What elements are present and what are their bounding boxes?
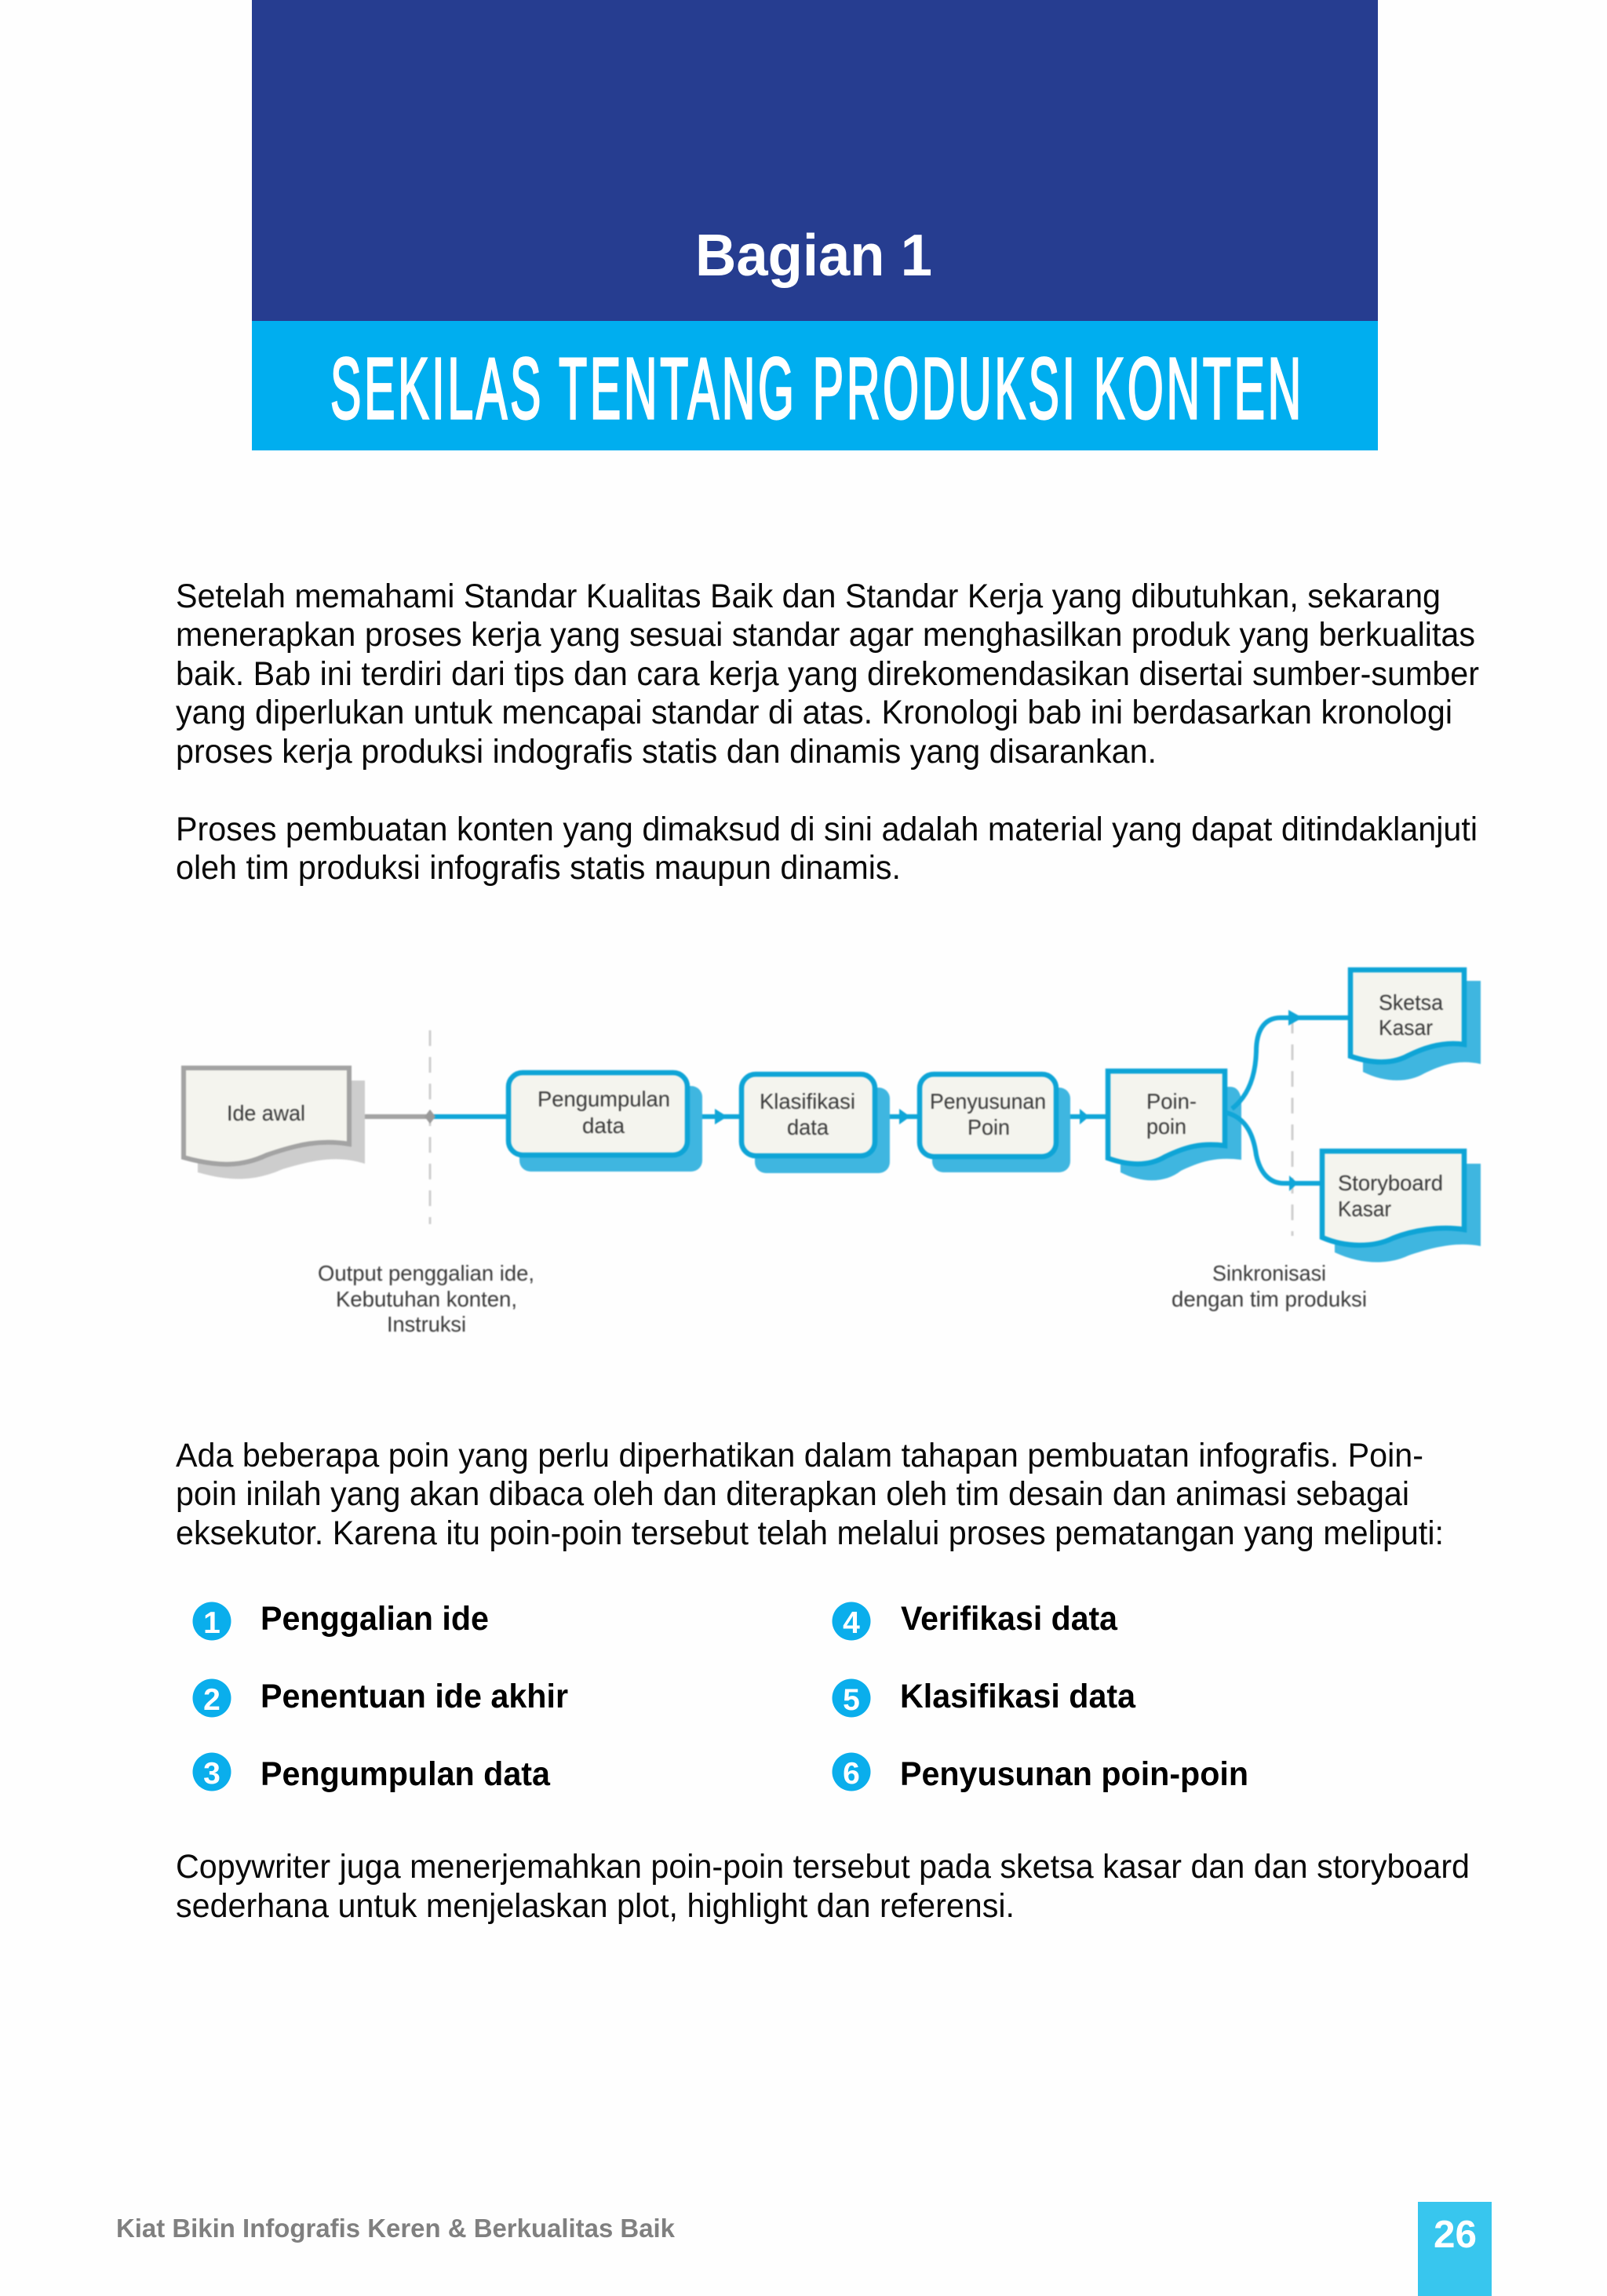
text block: closing paragraph: sederhana untuk menjelaskan plot, highlight dan referensi.	[176, 1887, 1015, 1925]
list item 2: Penentuan ide akhir	[261, 1678, 568, 1715]
document: Sketsa Kasar: Sketsa	[1379, 990, 1444, 1015]
text block: process definition paragraph	[176, 811, 1478, 887]
text block: closing paragraph: Copywriter juga menerjemahkan poin-poin tersebut pada sketsa kasar dan dan storyboard	[176, 1848, 1470, 1886]
list item 5: 5	[843, 1683, 860, 1717]
footer: page number: 26	[1434, 2214, 1477, 2256]
divider: left dashed line	[428, 1030, 432, 1224]
caption: sync with production team	[1172, 1261, 1367, 1311]
arrow: to Penyusunan	[890, 1109, 918, 1124]
document: Storyboard Kasar: Storyboard	[1338, 1171, 1443, 1195]
text block: points paragraph: Ada beberapa poin yang perlu diperhatikan dalam tahapan pembuatan infografis. Poin-	[176, 1437, 1423, 1474]
list item 4: 4	[843, 1606, 860, 1640]
divider: right dashed line	[1292, 1018, 1293, 1236]
process box: Klasifikasi data	[742, 1074, 890, 1173]
arrow: to Storyboard Kasar	[1226, 1113, 1321, 1191]
list item 6: Penyusunan poin-poin	[900, 1756, 1248, 1793]
arrow: to Poin-poin	[1070, 1109, 1106, 1124]
list item 3: 3	[203, 1757, 220, 1791]
text block: intro paragraph: baik. Bab ini terdiri dari tips dan cara kerja yang direkomendasikan disertai sumber-sumber	[176, 655, 1479, 693]
document: Ide awal: Ide awal	[227, 1101, 305, 1125]
list item 2: 2	[203, 1683, 220, 1717]
arrow: to Sketsa Kasar	[1232, 1010, 1349, 1109]
caption: output of idea exploration: Kebutuhan konten,	[336, 1287, 517, 1311]
text block: intro paragraph: Setelah memahami Standar Kualitas Baik dan Standar Kerja yang dibutuhkan, sekarang	[176, 578, 1441, 615]
document: Poin-poin	[1108, 1071, 1241, 1180]
caption: output of idea exploration: Output penggalian ide,	[318, 1261, 534, 1285]
list item 4: Verifikasi data	[901, 1601, 1117, 1638]
footer: page number	[1418, 2202, 1492, 2296]
text block: intro paragraph: yang diperlukan untuk mencapai standar di atas. Kronologi bab ini berdasarkan kronologi	[176, 694, 1452, 731]
document: Poin-poin: Poin-	[1146, 1089, 1197, 1113]
process box: Klasifikasi data: data	[787, 1115, 829, 1139]
process box: Klasifikasi data: Klasifikasi	[760, 1089, 855, 1113]
document: Sketsa Kasar	[1350, 970, 1481, 1081]
text block: intro paragraph: menerapkan proses kerja yang sesuai standar agar menghasilkan produk yang berkualitas	[176, 616, 1475, 654]
arrow: output of idea to data collection	[362, 1110, 507, 1124]
footer: book title: Kiat Bikin Infografis Keren & Berkualitas Baik	[116, 2214, 676, 2243]
list item 5: Klasifikasi data	[900, 1678, 1135, 1715]
list item 4	[832, 1601, 1117, 1640]
document: Storyboard Kasar	[1322, 1151, 1481, 1263]
header: section band	[252, 0, 1378, 450]
process box: Penyusunan Poin: Poin	[967, 1115, 1010, 1139]
document: Sketsa Kasar: Kasar	[1379, 1015, 1433, 1040]
document: Ide awal	[184, 1068, 365, 1179]
text block: process definition paragraph: oleh tim produksi infografis statis maupun dinamis.	[176, 849, 901, 887]
text block: points paragraph: eksekutor. Karena itu poin-poin tersebut telah melalui proses pematangan yang meliputi:	[176, 1514, 1444, 1552]
process box: Penyusunan Poin: Penyusunan	[930, 1089, 1046, 1113]
text block: intro paragraph: proses kerja produksi indografis statis dan dinamis yang disarankan.	[176, 733, 1157, 771]
text block: intro paragraph	[176, 578, 1479, 771]
text block: points paragraph	[176, 1437, 1444, 1552]
caption: sync with production team: dengan tim produksi	[1172, 1287, 1367, 1311]
caption: output of idea exploration: Instruksi	[387, 1312, 466, 1336]
document: Storyboard Kasar: Kasar	[1338, 1197, 1391, 1221]
list item 6: 6	[843, 1757, 860, 1791]
document: Poin-poin: poin	[1146, 1114, 1186, 1139]
process box: Penyusunan Poin	[920, 1074, 1070, 1172]
list item 1: 1	[203, 1606, 220, 1640]
arrow: to Klasifikasi	[702, 1109, 740, 1124]
numbered list: stages	[193, 1601, 1248, 1793]
process box: Pengumpulan data	[508, 1073, 702, 1172]
process box: Pengumpulan data: Pengumpulan	[537, 1087, 670, 1111]
process box: Pengumpulan data: data	[582, 1113, 625, 1138]
list item 1: Penggalian ide	[261, 1601, 489, 1638]
text block: points paragraph: poin inilah yang akan dibaca oleh dan diterapkan oleh tim desain dan animasi sebagai	[176, 1475, 1409, 1513]
flow diagram: content production process	[184, 970, 1481, 1336]
heading: Bagian 1: Bagian 1	[695, 222, 932, 288]
caption: sync with production team: Sinkronisasi	[1212, 1261, 1326, 1285]
text block: closing paragraph	[176, 1848, 1470, 1925]
list item 3: Pengumpulan data	[261, 1756, 550, 1793]
caption: output of idea exploration	[318, 1261, 534, 1336]
text block: process definition paragraph: Proses pembuatan konten yang dimaksud di sini adalah material yang dapat ditindaklanjuti	[176, 811, 1478, 848]
